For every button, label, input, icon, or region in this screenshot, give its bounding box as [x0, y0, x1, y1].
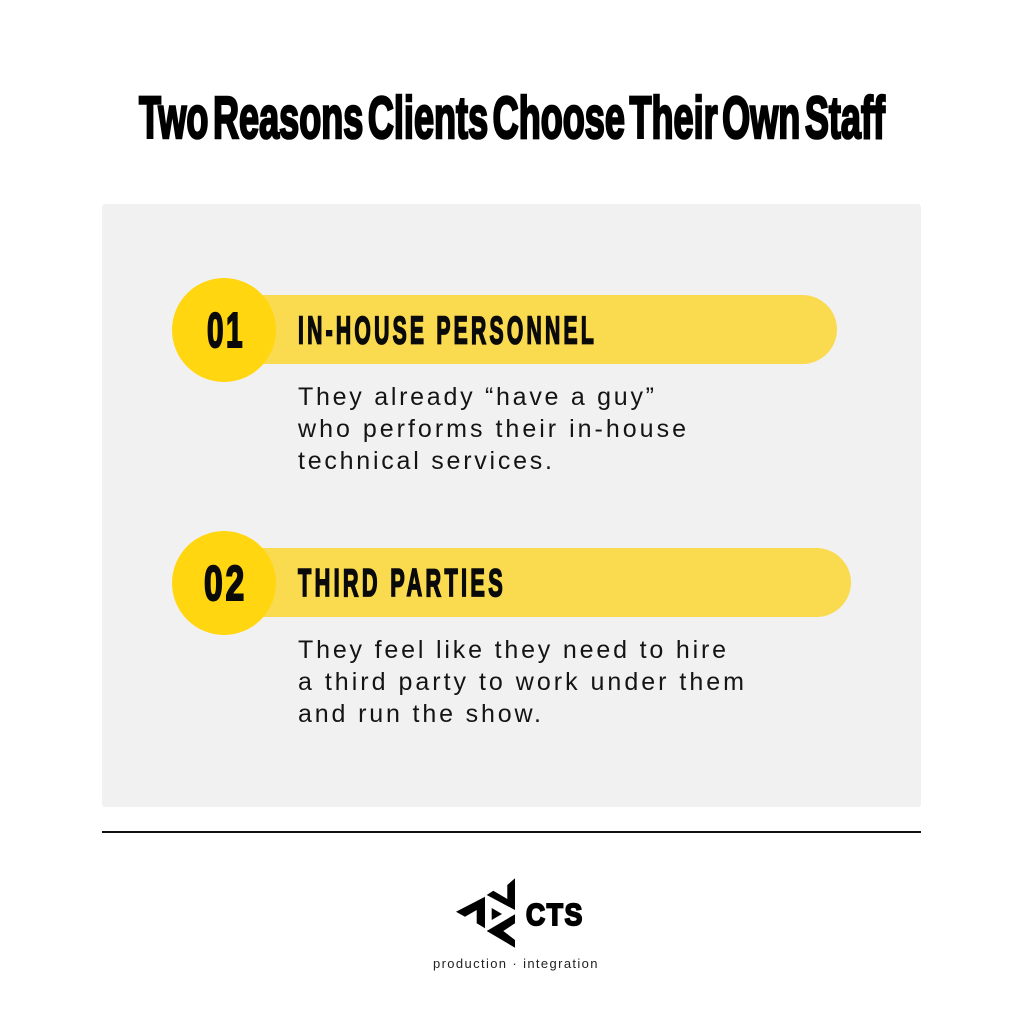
- reason 2 heading: THIRD PARTIES: [298, 562, 506, 605]
- reason 2: [172, 531, 851, 728]
- reason 1 number badge: 01: [207, 304, 245, 358]
- reason 1: [172, 278, 837, 475]
- reason 1 banner: [224, 295, 837, 364]
- reason 1 description: They already “have a guy”: [298, 383, 654, 411]
- reason 1 description: [297, 383, 686, 475]
- reason 2 description: and run the show.: [298, 700, 541, 728]
- reason 2 number badge: 02: [204, 557, 247, 611]
- icon: CTS triangle mark: [456, 878, 515, 948]
- reason 2 banner: [224, 548, 851, 617]
- reason 1 heading: IN-HOUSE PERSONNEL: [298, 310, 597, 352]
- logo: [433, 878, 598, 971]
- logo tagline: production · integration: [433, 956, 598, 971]
- reason 2 number badge: [172, 531, 276, 635]
- reason 1 number badge: [172, 278, 276, 382]
- logo wordmark: CTS: [526, 897, 584, 932]
- reason 1 description: technical services.: [298, 447, 552, 475]
- reason 2 description: [298, 636, 744, 728]
- reason 2 description: They feel like they need to hire: [298, 636, 726, 664]
- reason 1 description: who performs their in-house: [297, 415, 686, 443]
- panel: reasons: [102, 204, 921, 807]
- reason 2 description: a third party to work under them: [298, 668, 744, 696]
